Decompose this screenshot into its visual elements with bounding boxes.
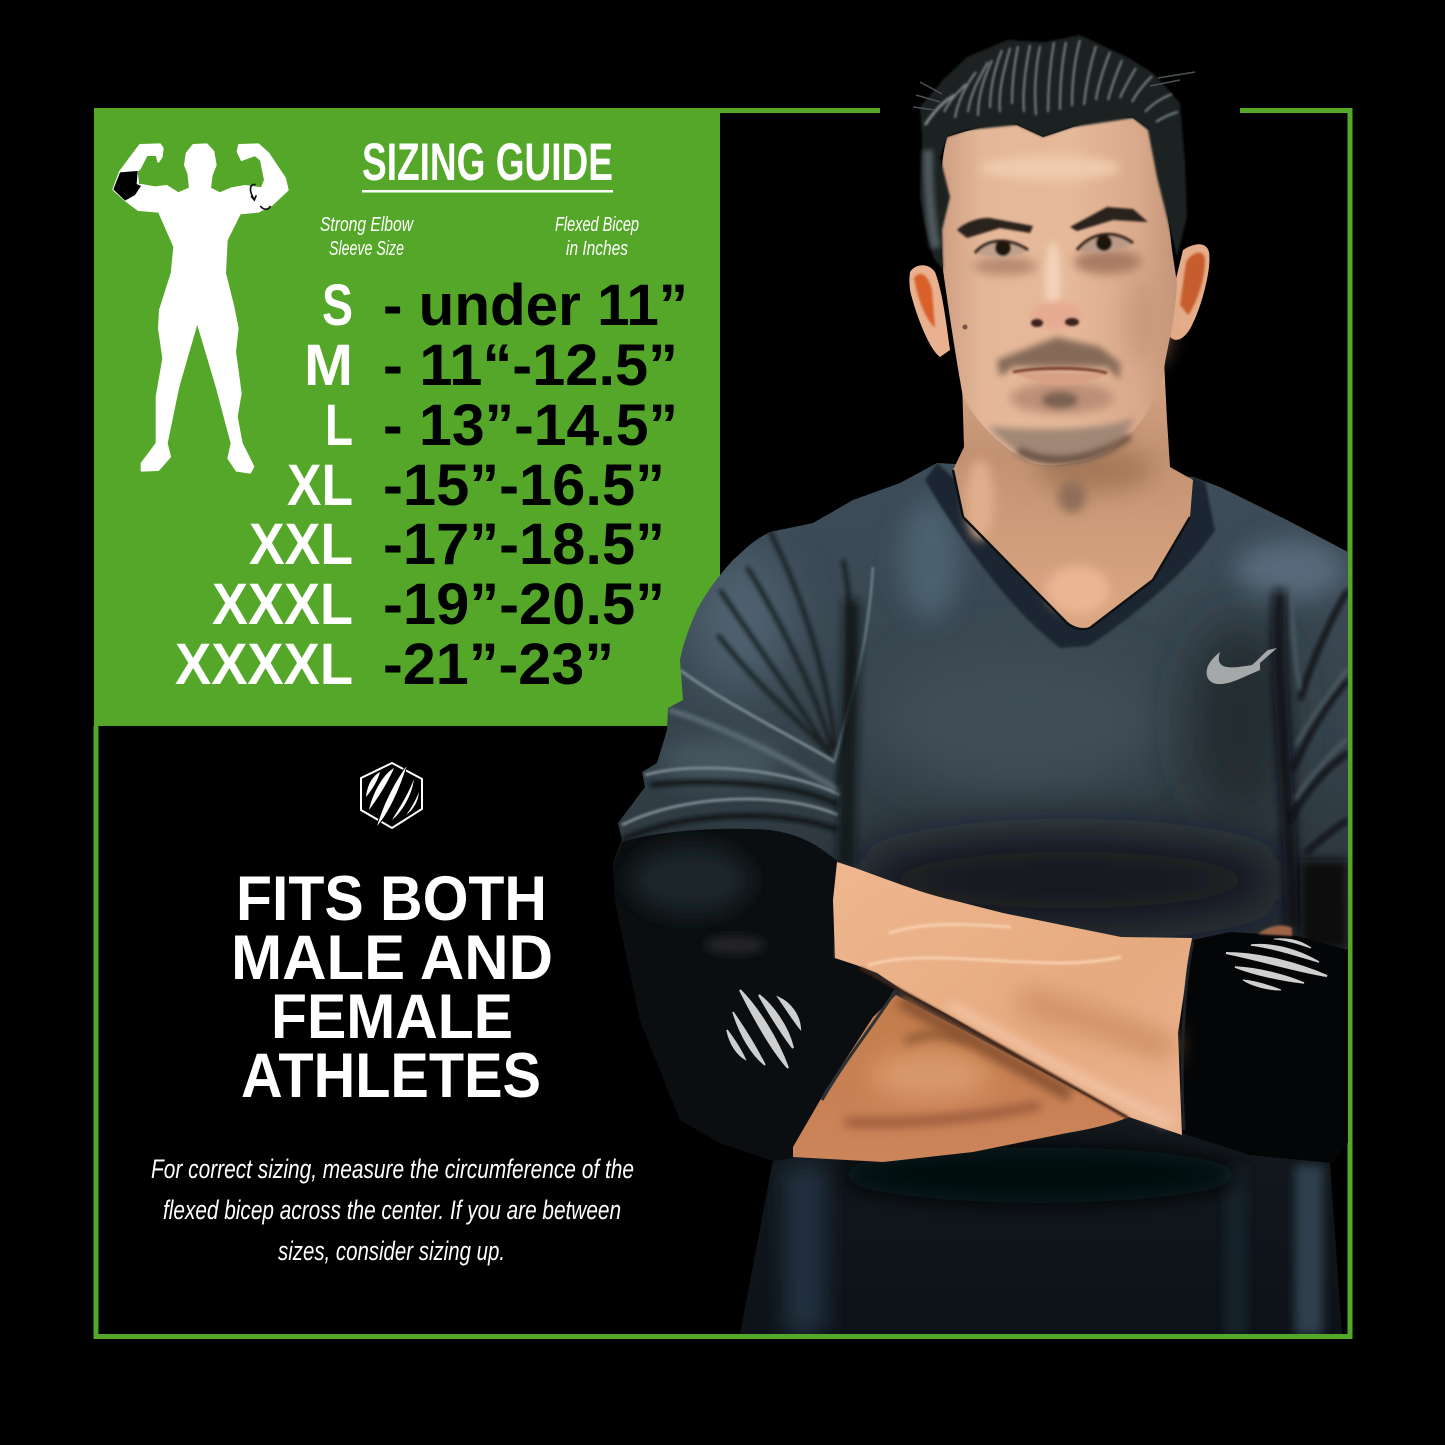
headline — [231, 864, 553, 1111]
sizing note: sizes, consider sizing up. — [278, 1236, 505, 1266]
size labels: L — [325, 393, 353, 458]
shirt — [613, 463, 1348, 1334]
eyebrow: left — [957, 218, 1033, 238]
heading underline — [362, 190, 613, 192]
size ranges: -21”-23” — [383, 632, 614, 697]
headline: FITS BOTH — [236, 864, 547, 934]
forearm veins and shading — [868, 924, 1172, 1122]
icon: face mole — [962, 324, 968, 330]
sleeve logo: right claw marks — [1226, 939, 1327, 990]
size ranges — [383, 273, 688, 697]
column label: flexed bicep — [555, 214, 639, 260]
sleeve sheen — [630, 846, 750, 914]
sleeve: viewer-left arm — [613, 829, 896, 1161]
heading: sizing guide: SIZING GUIDE — [362, 133, 613, 192]
lips — [1013, 368, 1107, 385]
neck and chest skin — [953, 360, 1193, 629]
silhouette — [113, 144, 288, 473]
size labels — [175, 273, 353, 697]
icon: hexagon claw logo — [361, 763, 422, 828]
hair wisps — [913, 72, 1195, 110]
elbow sleeve marker — [113, 171, 141, 201]
sleeve right cuff band — [1182, 942, 1193, 1130]
green frame — [96, 110, 1350, 1336]
size labels: M — [304, 333, 353, 398]
sleeve cuff band — [822, 990, 896, 1100]
hair — [920, 35, 1187, 270]
headline: FEMALE — [271, 982, 513, 1052]
size labels: XL — [287, 453, 353, 518]
sizing note — [151, 1154, 634, 1266]
hair strands — [925, 40, 1178, 248]
size labels: XXL — [249, 512, 353, 577]
hand knuckles — [1258, 926, 1292, 936]
size ranges: -19”-20.5” — [383, 572, 665, 637]
column label: flexed bicep: Flexed Bicep — [555, 214, 639, 236]
forearm underside shadow — [860, 968, 1128, 1118]
headline: ATHLETES — [241, 1041, 541, 1111]
neck shading — [953, 448, 1190, 629]
size ranges: - 11“-12.5” — [383, 333, 678, 398]
face — [940, 118, 1177, 465]
nose — [1031, 301, 1083, 329]
size labels: S — [322, 273, 353, 338]
sizing note: flexed bicep across the center. If you are between — [163, 1195, 621, 1225]
size ranges: -17”-18.5” — [383, 512, 665, 577]
ear: left — [909, 265, 950, 357]
sleeve logo: left claw marks — [727, 990, 800, 1068]
size ranges: - under 11” — [383, 273, 688, 338]
lower arm — [793, 995, 1129, 1162]
face shading — [973, 156, 1165, 464]
sleeve sheen lower — [705, 937, 765, 953]
sizing note: For correct sizing, measure the circumference of the — [151, 1154, 634, 1184]
size labels: XXXXL — [175, 632, 353, 697]
collar band — [925, 463, 1215, 648]
eye: right — [1077, 234, 1133, 253]
column label: flexed bicep: in Inches — [566, 238, 628, 260]
upper forearm — [833, 862, 1192, 1135]
column label: sleeve size: Sleeve Size — [329, 238, 404, 260]
headline: MALE AND — [231, 923, 553, 993]
lower arm muscle shading — [845, 1000, 1070, 1123]
size labels: XXXL — [212, 572, 353, 637]
column label: sleeve size — [320, 214, 414, 260]
eye: left — [975, 240, 1028, 257]
eyebrow: right — [1070, 207, 1148, 231]
photo: man with crossed arms wearing elbow sleeves — [613, 35, 1348, 1335]
size ranges: - 13”-14.5” — [383, 393, 678, 458]
icon: body silhouette with sleeve — [113, 144, 288, 473]
column label: sleeve size: Strong Elbow — [320, 214, 414, 236]
shirt folds and shading — [622, 500, 1348, 1335]
size ranges: -15”-16.5” — [383, 453, 665, 518]
ear: right — [1170, 244, 1209, 340]
measuring arrow — [250, 185, 270, 209]
moustache — [997, 337, 1120, 380]
icon: shirt swoosh — [1207, 648, 1277, 684]
panel: green sizing panel — [94, 108, 720, 726]
sleeve: viewer-right arm — [1178, 932, 1348, 1163]
